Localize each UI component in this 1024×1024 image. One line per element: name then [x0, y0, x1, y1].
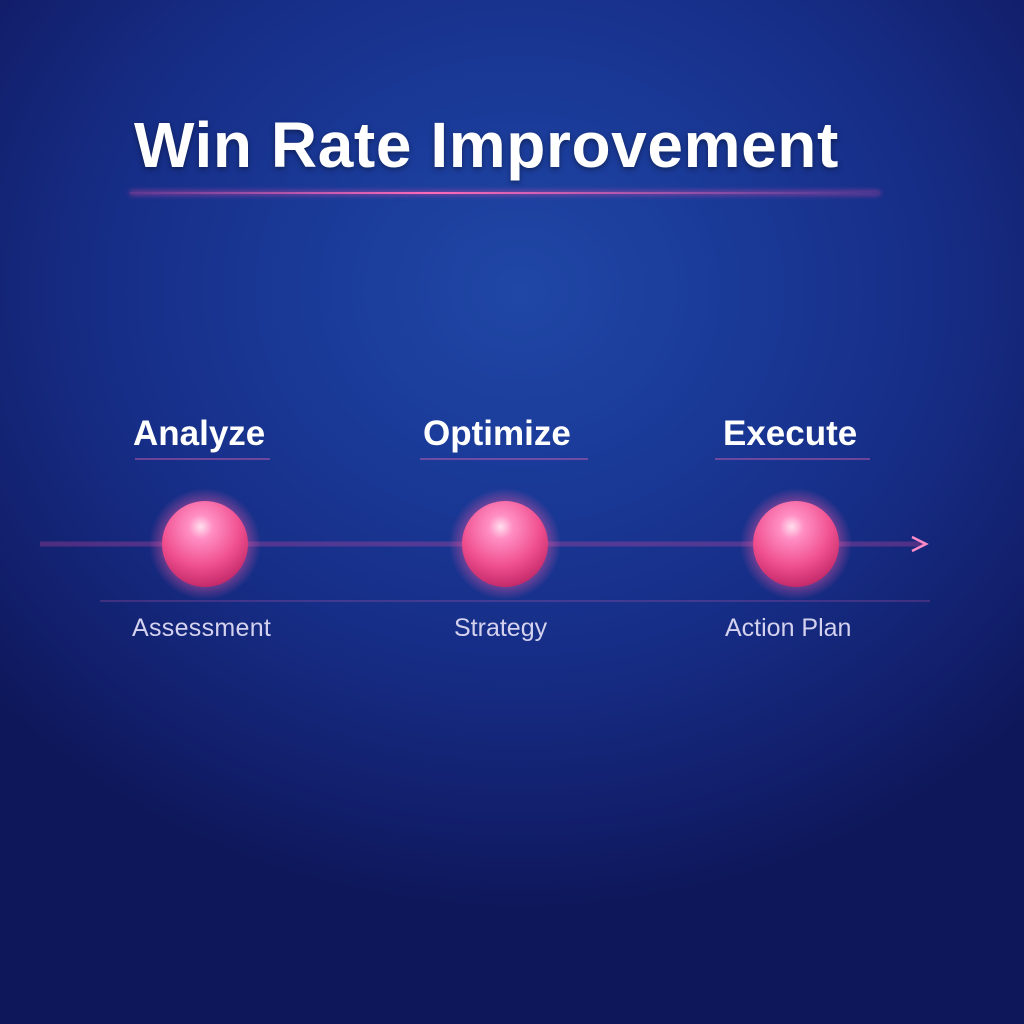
sublabel: Assessment: Assessment: [132, 614, 271, 642]
dividers under labels: [100, 459, 930, 601]
sublabel: Action Plan: Action Plan: [725, 614, 851, 642]
node: execute: [740, 488, 852, 600]
node: analyze: [149, 488, 261, 600]
title underline: [130, 192, 880, 194]
node: optimize: [449, 488, 561, 600]
label: Execute: Execute: [723, 414, 857, 453]
arrow line: [40, 537, 926, 551]
title: Win Rate Improvement: [134, 109, 839, 181]
label: Optimize: Optimize: [423, 414, 571, 453]
sublabel: Strategy: Strategy: [454, 614, 547, 642]
label: Analyze: Analyze: [133, 414, 265, 453]
